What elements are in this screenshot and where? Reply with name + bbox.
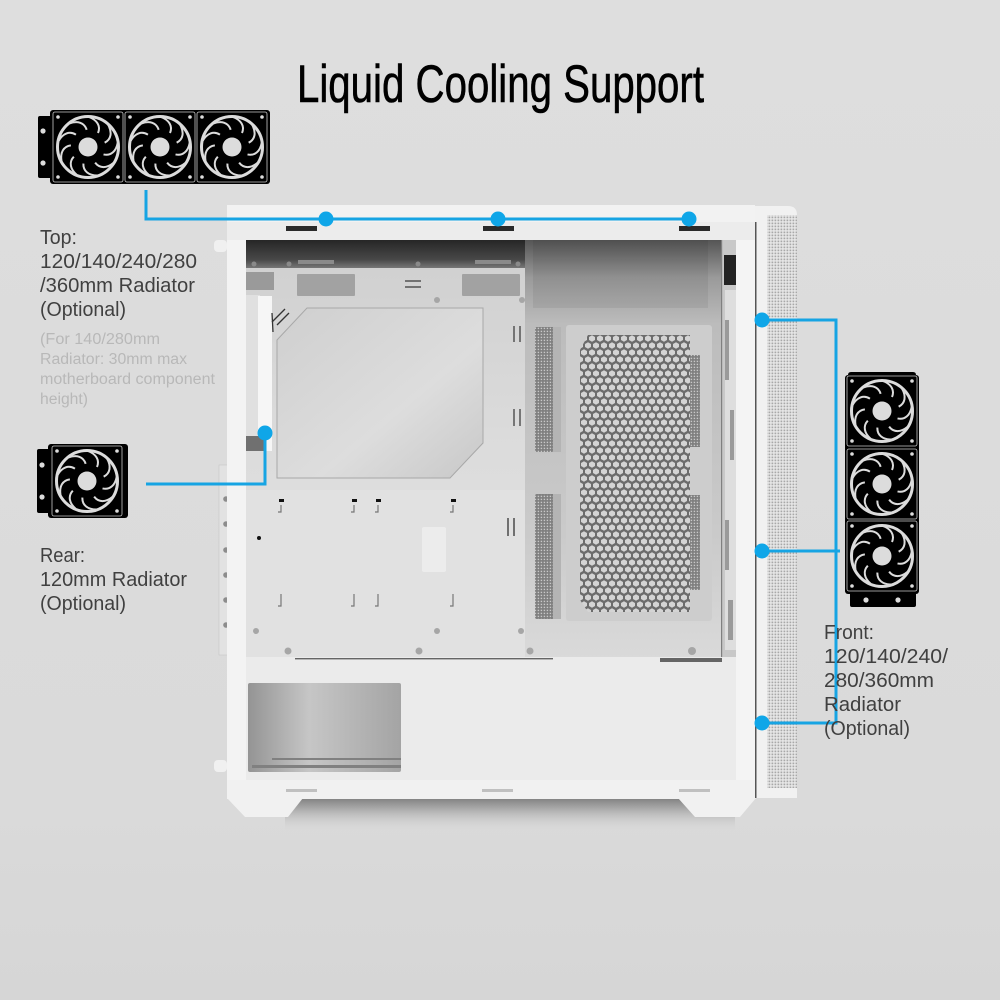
top tray cutouts [246, 272, 520, 296]
note: top radiator clearance [40, 331, 216, 408]
PSU opening [248, 683, 401, 772]
PSU shroud [246, 657, 736, 780]
hex mesh panel [580, 335, 690, 612]
label: front: Radiator [824, 694, 901, 716]
label: top: (Optional) [40, 299, 126, 321]
note: top radiator clearance: motherboard component [40, 371, 216, 388]
feet [227, 798, 756, 817]
motherboard tray [246, 240, 736, 660]
motherboard cutout [277, 308, 483, 478]
icon: rear 120mm radiator [37, 444, 128, 518]
label: front: Front: [824, 622, 874, 644]
note: top radiator clearance: height) [40, 391, 88, 408]
PC case, side view [214, 205, 797, 832]
label: front: 120/140/240/ [824, 646, 948, 668]
note: top radiator clearance: Radiator: 30mm max [40, 351, 187, 368]
thumb screws [214, 240, 227, 772]
fine mesh beside hex panel [686, 355, 700, 590]
cavity screws [252, 260, 520, 266]
rear expansion bracket [219, 465, 229, 655]
hex panel plate [566, 325, 712, 621]
label: top: Top: [40, 227, 77, 249]
icon: top 360mm radiator [38, 110, 270, 184]
floor shadow [285, 798, 735, 832]
cable routing slots [405, 281, 520, 426]
top latches [286, 226, 710, 231]
front mesh panel [755, 206, 797, 798]
label: front: (Optional) [824, 718, 910, 740]
tray mid section [246, 490, 525, 660]
cable tie plate [422, 527, 446, 572]
label: rear: Rear: [40, 545, 85, 567]
icon: front 360mm radiator [845, 372, 919, 607]
right compartment [525, 240, 722, 660]
bottom frame [227, 780, 755, 799]
label: top: 120/140/240/280 [40, 251, 197, 273]
rear exhaust fan [246, 295, 289, 451]
vertical frame [227, 222, 246, 798]
case top lip [227, 205, 755, 222]
tray screws [253, 297, 696, 655]
label: rear [40, 545, 187, 615]
top dark cavity [246, 240, 526, 268]
label: front: 280/360mm [824, 670, 934, 692]
connector: rear radiator [146, 426, 272, 484]
label: rear: (Optional) [40, 593, 126, 615]
title: Liquid Cooling Support [297, 55, 704, 114]
note: top radiator clearance: (For 140/280mm [40, 331, 160, 348]
front radiator bay [721, 240, 736, 660]
slots lower [508, 518, 514, 536]
label: top: /360mm Radiator [40, 275, 195, 297]
connector: top radiator [146, 190, 696, 226]
label: top [40, 227, 197, 321]
label: front [824, 622, 948, 740]
tray hooks [278, 505, 453, 606]
top frame [227, 222, 755, 240]
perforated vents [535, 327, 561, 619]
label: rear: 120mm Radiator [40, 569, 187, 591]
connector: front radiator [754, 312, 840, 730]
